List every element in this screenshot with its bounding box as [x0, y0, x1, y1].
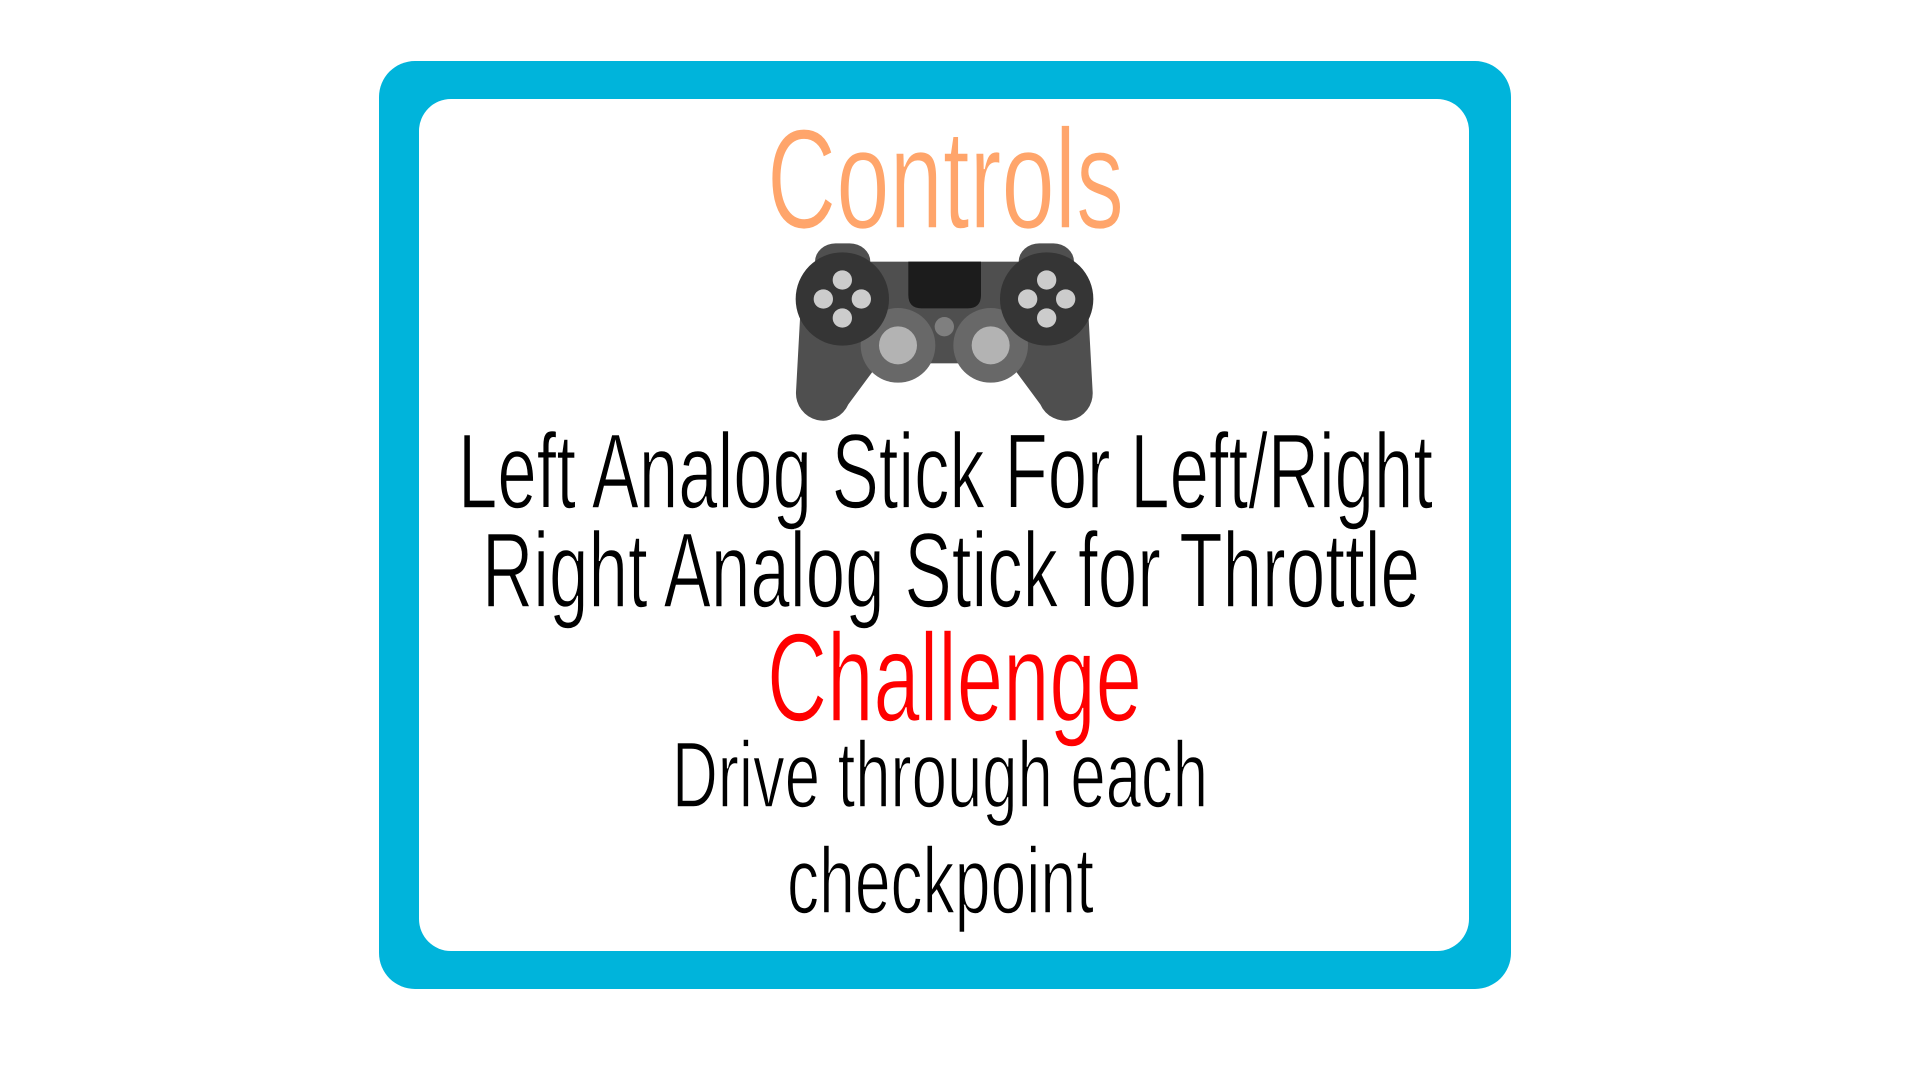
text: left stick instruction: Left Analog Stick For Left/Right [458, 411, 1433, 531]
heading: Challenge: Challenge [767, 609, 1142, 748]
heading: Controls: Controls [767, 100, 1124, 259]
text: right stick instruction: Right Analog Stick for Throttle [482, 510, 1420, 630]
icon: game controller [796, 243, 1093, 421]
text: challenge line 1: Drive through each [672, 722, 1208, 827]
text: challenge line 2: checkpoint [787, 828, 1094, 933]
panel: white card [419, 99, 1469, 951]
panel: blue frame [379, 61, 1511, 989]
